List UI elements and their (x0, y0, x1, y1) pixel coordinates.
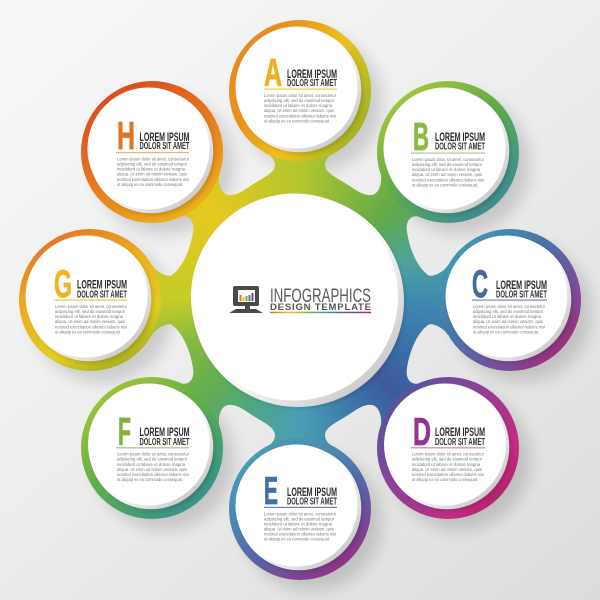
card E: nostrud exercitation ullamco laboris nisi (264, 532, 336, 537)
card G: nostrud exercitation ullamco laboris nisi (55, 324, 127, 329)
card F: nostrud exercitation ullamco laboris nisi (117, 472, 189, 477)
card D: ut aliquip ex ea commodo consequat. (412, 477, 478, 482)
card F (81, 377, 223, 519)
card G (19, 229, 161, 371)
central white circle (191, 194, 405, 408)
card B: Lorem ipsum dolor sit amet, consectetur (412, 157, 484, 162)
card B: incididunt ut labore et dolore magna (412, 167, 480, 172)
card E (229, 438, 371, 580)
card B: adipiscing elit, sed do eiusmod tempor (412, 162, 482, 167)
card A: nostrud exercitation ullamco laboris nisi (264, 113, 336, 118)
card D: DOLOR SIT AMET (435, 437, 485, 448)
card B: LOREM IPSUM (435, 132, 485, 144)
card A: aliqua. Ut enim ad minim veniam, quis (264, 108, 335, 113)
card B (377, 81, 519, 223)
card F: aliqua. Ut enim ad minim veniam, quis (117, 467, 188, 472)
card H: LOREM IPSUM (140, 132, 190, 144)
card H: adipiscing elit, sed do eiusmod tempor (117, 162, 187, 166)
card H: H (117, 115, 135, 158)
card H (81, 81, 223, 223)
card C: DOLOR SIT AMET (496, 290, 547, 300)
card D: D (413, 411, 431, 454)
central gradient blob with necks (152, 140, 448, 460)
card H: incididunt ut labore et dolore magna (117, 167, 185, 172)
card F: Lorem ipsum dolor sit amet, consectetur (117, 452, 189, 457)
card D: incididunt ut labore et dolore magna (412, 462, 480, 467)
card E: DOLOR SIT AMET (287, 496, 337, 507)
card G: adipiscing elit, sed do eiusmod tempor (55, 309, 125, 314)
card H: nostrud exercitation ullamco laboris nisi (117, 177, 189, 182)
card A: DOLOR SIT AMET (287, 78, 337, 89)
card F: incididunt ut labore et dolore magna (117, 462, 185, 467)
card C: C (472, 263, 488, 306)
card C: nostrud exercitation ullamco laboris nisi (473, 324, 545, 329)
card F: LOREM IPSUM (140, 427, 190, 439)
card C: adipiscing elit, sed do eiusmod tempor (473, 309, 543, 314)
card B: DOLOR SIT AMET (435, 141, 485, 152)
card H: Lorem ipsum dolor sit amet, consectetur (117, 156, 189, 162)
card A (229, 20, 371, 162)
card D: Lorem ipsum dolor sit amet, consectetur (412, 452, 484, 457)
card E: LOREM IPSUM (287, 487, 337, 499)
card B: ut aliquip ex ea commodo consequat. (412, 182, 478, 187)
card C: Lorem ipsum dolor sit amet, consectetur (473, 304, 545, 309)
card E: E (264, 470, 278, 513)
card G: DOLOR SIT AMET (77, 290, 127, 300)
card F: F (118, 411, 131, 454)
card D: nostrud exercitation ullamco laboris nisi (412, 472, 484, 477)
card A: adipiscing elit, sed do eiusmod tempor (264, 98, 334, 103)
card E: incididunt ut labore et dolore magna (264, 521, 332, 526)
card C (439, 229, 581, 371)
card F: ut aliquip ex ea commodo consequat. (117, 477, 183, 482)
card E: adipiscing elit, sed do eiusmod tempor (264, 516, 334, 521)
card B: B (413, 116, 429, 159)
card D: adipiscing elit, sed do eiusmod tempor (412, 457, 482, 462)
card F: DOLOR SIT AMET (140, 437, 190, 448)
card A: LOREM IPSUM (287, 69, 337, 81)
card C: ut aliquip ex ea commodo consequat. (473, 329, 539, 334)
title: infographics: INFOGRAPHICS (270, 285, 371, 307)
card E: aliqua. Ut enim ad minim veniam, quis (264, 526, 335, 532)
card G: aliqua. Ut enim ad minim veniam, quis (55, 319, 126, 324)
card D (377, 377, 519, 519)
rainbow underline (270, 312, 371, 313)
card G: LOREM IPSUM (77, 280, 127, 292)
card H: aliqua. Ut enim ad minim veniam, quis (117, 172, 188, 177)
card C: LOREM IPSUM (496, 280, 547, 292)
card B: nostrud exercitation ullamco laboris nisi (412, 177, 484, 182)
card E: Lorem ipsum dolor sit amet, consectetur (264, 511, 336, 516)
card A: Lorem ipsum dolor sit amet, consectetur (264, 93, 336, 98)
icon: computer monitor with bar chart (229, 286, 263, 313)
card H: DOLOR SIT AMET (140, 141, 190, 152)
card B: aliqua. Ut enim ad minim veniam, quis (412, 172, 483, 177)
card E: ut aliquip ex ea commodo consequat. (264, 537, 330, 542)
card C: incididunt ut labore et dolore magna (473, 314, 541, 319)
card G: Lorem ipsum dolor sit amet, consectetur (55, 304, 127, 309)
subtitle: design template: DESIGN TEMPLATE (270, 302, 371, 313)
card H: ut aliquip ex ea commodo consequat. (117, 182, 183, 187)
card C: aliqua. Ut enim ad minim veniam, quis (473, 319, 544, 324)
card G: incididunt ut labore et dolore magna (55, 314, 123, 319)
card F: adipiscing elit, sed do eiusmod tempor (117, 457, 187, 462)
card D: aliqua. Ut enim ad minim veniam, quis (412, 467, 483, 472)
card A: A (264, 52, 282, 95)
card D: LOREM IPSUM (435, 427, 485, 439)
card A: ut aliquip ex ea commodo consequat. (264, 118, 330, 123)
card A: incididunt ut labore et dolore magna (264, 103, 332, 108)
card G: ut aliquip ex ea commodo consequat. (55, 329, 121, 334)
card G: G (54, 263, 72, 306)
